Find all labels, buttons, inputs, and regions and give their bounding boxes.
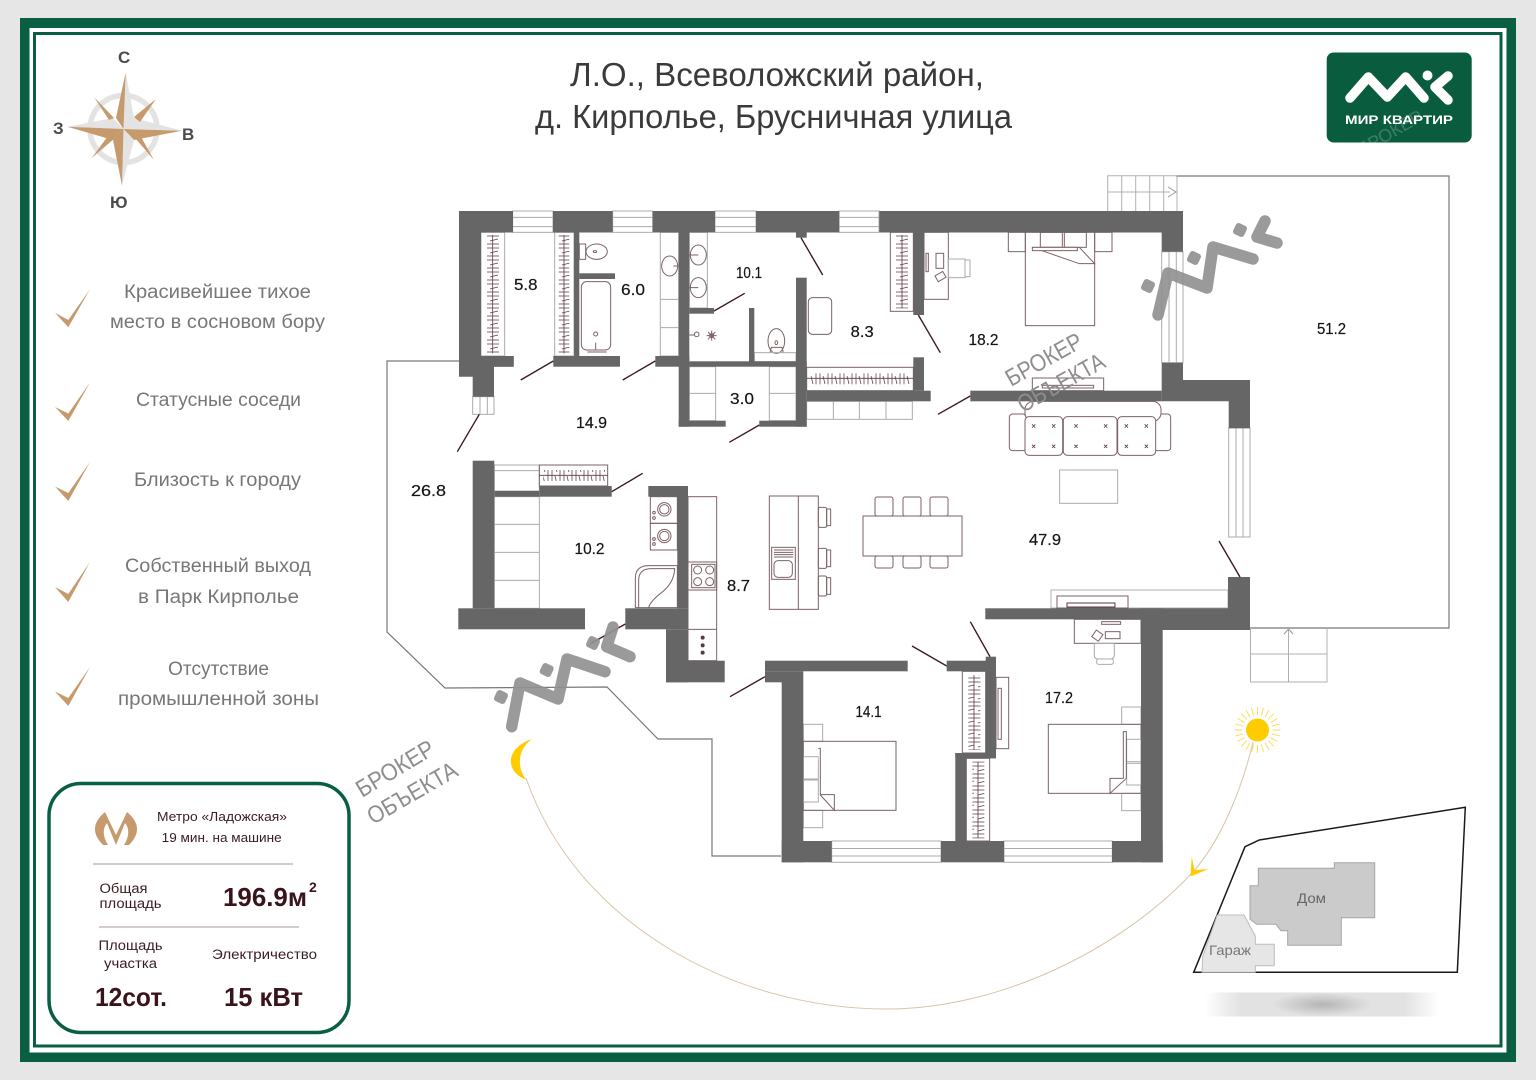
wardrobe 6.0	[555, 232, 574, 356]
electricity: Электричество	[212, 947, 317, 962]
watermark text south: БРОКЕР	[351, 735, 440, 803]
shower	[689, 331, 717, 341]
tv	[1032, 378, 1104, 391]
double sink	[689, 232, 707, 308]
compass rose: В	[182, 125, 194, 144]
shelves 10.2	[494, 465, 539, 608]
feature: quiet place: Красивейшее тихое	[124, 282, 311, 303]
watermark text north: ОБЪЕКТА	[1013, 348, 1110, 418]
room areas: 51.2	[1317, 321, 1346, 338]
bed 17.2	[1048, 707, 1141, 811]
door swings	[457, 238, 1240, 697]
total area: Общая	[100, 881, 148, 896]
icon: sun	[1234, 707, 1280, 753]
room areas: 14.1	[856, 704, 882, 721]
tv 17.2	[996, 677, 1009, 749]
living room tv unit	[1051, 590, 1228, 608]
icon: moon	[511, 739, 532, 780]
watermark text north	[1001, 328, 1110, 418]
room areas	[411, 265, 1346, 721]
room areas: 8.3	[851, 324, 874, 341]
watermark text north: БРОКЕР	[1001, 328, 1087, 392]
garage: Гараж	[1209, 942, 1252, 958]
north-west furniture	[481, 232, 796, 421]
west and kitchen furniture	[494, 465, 831, 661]
storage below wardrobe	[807, 401, 912, 419]
southern furniture	[803, 619, 1141, 841]
dining table with chairs	[863, 497, 962, 568]
plot area	[95, 938, 167, 1012]
room areas: 10.1	[736, 265, 762, 282]
compass rose: З	[53, 119, 64, 138]
info card	[49, 784, 349, 1032]
island and stools	[769, 496, 831, 609]
feature: park exit: в Парк Кирполье	[138, 587, 299, 608]
bed 14.1	[803, 724, 896, 828]
plot boundary lines	[387, 176, 1449, 856]
feature: park exit: Собственный выход	[125, 556, 311, 577]
windows north	[473, 211, 879, 414]
title	[535, 56, 1013, 135]
title: Л.О., Всеволожский район,	[570, 56, 984, 93]
windows east and south	[832, 252, 1250, 862]
house	[1250, 863, 1375, 945]
watermark logo south-west	[494, 627, 630, 727]
desk and chair	[924, 232, 970, 299]
feature: no industry: промышленной зоны	[118, 689, 319, 710]
feature: quiet place: место в сосновом бору	[110, 312, 326, 333]
wardrobe horizontal	[807, 367, 913, 391]
metro text: 19 мин. на машине	[162, 831, 282, 845]
room areas: 6.0	[621, 282, 645, 299]
garage	[1202, 915, 1274, 972]
sun path arc	[526, 742, 1253, 1009]
walls	[458, 211, 1250, 862]
total area: 2	[309, 879, 317, 895]
feature: no industry	[55, 659, 319, 710]
total area: 196.9м	[223, 882, 307, 912]
metro text	[157, 810, 287, 845]
arrow on sun path	[1190, 857, 1208, 876]
room areas: 10.2	[574, 541, 604, 558]
feature: no industry: Отсутствие	[168, 659, 269, 680]
kitchen counter	[688, 497, 717, 661]
electricity: 15 кВт	[224, 982, 303, 1012]
title: д. Кирполье, Брусничная улица	[535, 98, 1013, 135]
plot area: участка	[104, 956, 158, 971]
room areas: 17.2	[1045, 690, 1073, 707]
room areas: 26.8	[411, 483, 446, 500]
feature: park exit	[55, 556, 311, 608]
feature: quiet place	[55, 282, 326, 333]
room areas: 3.0	[730, 391, 754, 408]
bottom stairs	[1250, 628, 1327, 682]
room areas: 18.2	[968, 332, 998, 349]
logo: Мир Квартир: БРОКЕР	[1354, 106, 1426, 159]
plot area: Площадь	[98, 938, 162, 953]
bed	[1008, 232, 1112, 326]
sink cabinet	[660, 232, 679, 356]
wardrobe vertical	[890, 232, 913, 311]
toilet 1	[579, 244, 607, 259]
feature: near city	[55, 462, 302, 501]
watermark text south: ОБЪЕКТА	[362, 757, 463, 830]
wardrobe 5.8	[481, 232, 505, 356]
top stairs	[1108, 176, 1177, 211]
bathtub	[581, 282, 611, 352]
corner bath	[635, 566, 677, 608]
logo: Мир Квартир	[1327, 52, 1472, 159]
room areas: 8.7	[727, 578, 750, 595]
watermark logo east	[1141, 221, 1277, 315]
room areas: 47.9	[1029, 532, 1061, 549]
watermark text south	[351, 735, 463, 830]
feature: neighbours	[55, 382, 301, 421]
wardrobe 10.2	[539, 465, 608, 486]
site plan shadow	[1205, 992, 1440, 1016]
coffee table	[1060, 470, 1118, 503]
total area: площадь	[100, 896, 162, 911]
site plan	[1194, 807, 1465, 972]
storage 3.0	[689, 367, 796, 421]
logo: Мир Квартир: МИР КВАРТИР	[1345, 113, 1453, 127]
vanity 8.3	[808, 298, 832, 334]
total area	[100, 879, 317, 912]
desk 17.2	[1074, 619, 1141, 664]
sofa	[1009, 401, 1171, 455]
feature: near city: Близость к городу	[134, 470, 302, 491]
washer and dryer	[650, 497, 677, 550]
north-east furniture	[807, 232, 1171, 503]
compass rose	[53, 48, 194, 212]
plot area: 12сот.	[95, 982, 167, 1012]
compass rose: Ю	[110, 193, 128, 212]
toilet 2	[754, 329, 796, 362]
house: Дом	[1297, 890, 1326, 906]
feature list	[55, 282, 326, 710]
icon: metro	[95, 812, 137, 845]
metro text: Метро «Ладожская»	[157, 810, 287, 824]
electricity	[212, 947, 317, 1012]
feature: neighbours: Статусные соседи	[136, 390, 301, 411]
wardrobes between bedrooms	[962, 671, 990, 841]
room areas: 14.9	[576, 415, 607, 432]
room areas: 5.8	[514, 277, 538, 294]
compass rose: С	[118, 48, 130, 67]
